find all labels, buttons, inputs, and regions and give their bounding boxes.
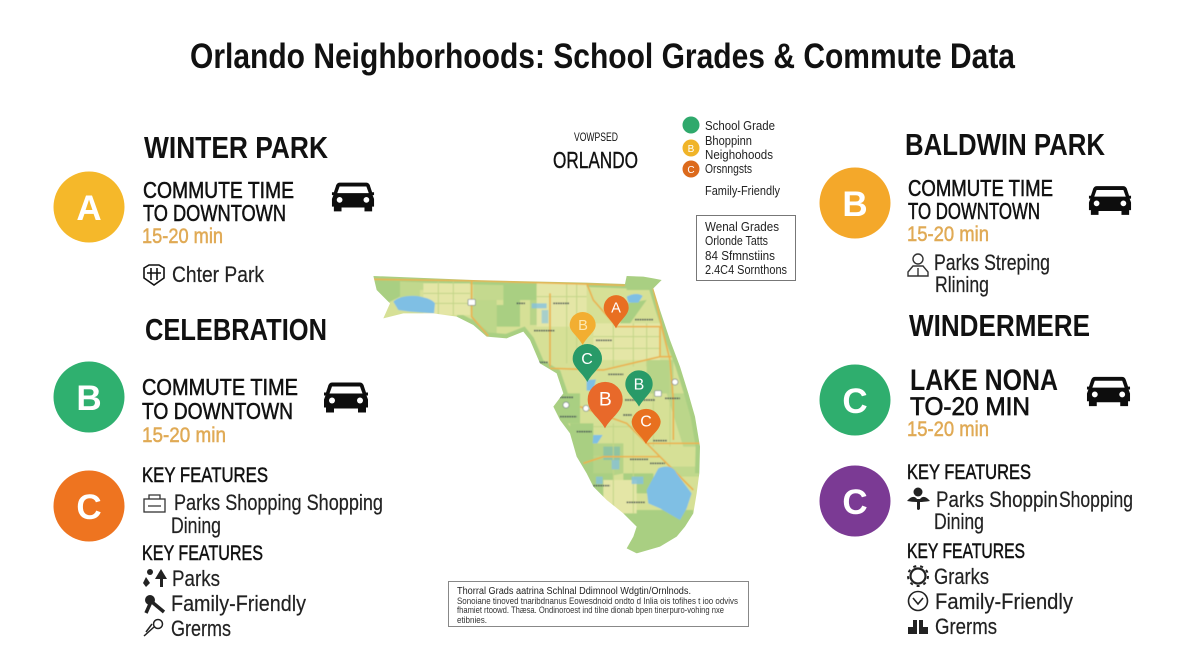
title: Orlando Neighborhoods: School Grades & Commute Data xyxy=(190,37,1015,76)
icon: tools xyxy=(145,595,164,613)
icon: car xyxy=(1087,377,1130,406)
stats box: 84 Sfmnstiins xyxy=(705,248,775,263)
grade badge B xyxy=(54,362,124,432)
map pin large orange B: B xyxy=(599,390,612,411)
commute text: 15-20 min xyxy=(142,424,226,447)
map pin yellow B: B xyxy=(578,318,588,334)
stats box: Wenal Grades xyxy=(705,219,779,234)
icon: flower xyxy=(144,620,162,636)
map pin A xyxy=(604,295,629,328)
grade badge B: B xyxy=(842,185,868,224)
stats box: Orlonde Tatts xyxy=(705,233,768,248)
feature text xyxy=(171,490,383,538)
legend marker B: B xyxy=(688,144,695,155)
panel: Winter Park xyxy=(54,130,374,287)
icon: gear xyxy=(908,566,928,586)
feature text: Chter Park xyxy=(172,262,265,287)
grade badge C: C xyxy=(842,483,868,522)
icon: check circle xyxy=(908,592,928,610)
grade badge B xyxy=(820,168,890,238)
icon: shield xyxy=(144,265,164,285)
stats box xyxy=(696,216,796,280)
legend labels: Bhoppinn xyxy=(705,133,752,148)
text: Parks: Parks xyxy=(172,566,220,591)
heading: Lake Nona: TO-20 MIN xyxy=(910,393,1030,421)
text: Grerms: Grerms xyxy=(171,616,231,641)
text: Family-Friendly: Family-Friendly xyxy=(171,591,306,616)
note box: fhamiet rtoowd. Thæsa. Ondinoroest ind tilne dionab bpen tinerpuro-vohing nxe xyxy=(457,605,724,615)
legend labels: Family-Friendly xyxy=(705,183,780,198)
grade badge B: B xyxy=(76,379,102,418)
feature text: Dining xyxy=(171,513,221,538)
feature text xyxy=(934,487,1133,534)
feature text: Parks Shoppin xyxy=(936,487,1058,512)
icon: car xyxy=(324,382,368,412)
panel: left key features xyxy=(54,464,383,641)
legend labels: Orsnngsts xyxy=(705,161,752,176)
map pin green B xyxy=(625,370,653,407)
map: Florida xyxy=(373,276,700,554)
map pin yellow B xyxy=(570,312,596,345)
grade badge A xyxy=(54,172,124,242)
commute text: 15-20 min xyxy=(142,225,223,248)
map pin large orange B xyxy=(588,382,623,428)
grade badge C xyxy=(820,364,890,436)
map pin green C xyxy=(573,344,602,382)
panel: Celebration xyxy=(54,312,368,447)
stats box: 2.4C4 Sornthons xyxy=(705,262,787,277)
panel: center heading xyxy=(553,130,638,173)
heading: Orlando: ORLANDO xyxy=(553,147,638,173)
legend labels: Neighohoods xyxy=(705,147,773,162)
feature text: Parks Shopping Shopping xyxy=(174,490,383,515)
feature text: Dining xyxy=(934,509,984,534)
note box: etibnies. xyxy=(457,615,487,625)
note box: Sonoiane tinoved tnaribdnanus Eowesdnoid ondto d Inlia ois tofihes t ioo odvivs xyxy=(457,596,738,606)
commute text: COMMUTE TIME xyxy=(908,175,1053,201)
commute text: 15-20 min xyxy=(907,223,989,246)
map pin green C: C xyxy=(581,351,593,368)
legend marker C: C xyxy=(687,165,695,176)
heading: Windermere: WINDERMERE xyxy=(909,308,1090,343)
note box: Thorral Grads aatrina Schlnal Ddimnool Wdgtin/Ornlnods. xyxy=(457,586,691,597)
grade badge C: C xyxy=(842,382,868,421)
panel: Baldwin Park xyxy=(820,127,1131,297)
heading: key features: KEY FEATURES xyxy=(907,540,1025,563)
icon: reader xyxy=(908,254,928,276)
grade badge C: C xyxy=(76,488,102,527)
legend labels xyxy=(705,118,780,198)
map pin green B: B xyxy=(634,376,644,393)
heading: key features: KEY FEATURES xyxy=(142,542,263,565)
feature text xyxy=(934,250,1050,297)
commute text: COMMUTE TIME xyxy=(142,374,298,400)
note box xyxy=(448,582,748,626)
commute text xyxy=(142,177,294,248)
heading: key features: KEY FEATURES xyxy=(142,464,268,487)
heading: key features: KEY FEATURES xyxy=(907,461,1031,484)
icon: car xyxy=(332,183,374,211)
heading: Winter Park: WINTER PARK xyxy=(144,130,329,165)
heading: Lake Nona: 15-20 min xyxy=(907,418,989,441)
legend labels: School Grade xyxy=(705,118,775,133)
panel: Windermere and Lake Nona xyxy=(820,308,1130,441)
heading: Baldwin Park: BALDWIN PARK xyxy=(905,127,1106,162)
text: Grerms: Grerms xyxy=(935,614,997,639)
feature text: Parks Streping xyxy=(934,250,1050,275)
panel: right key features xyxy=(820,461,1133,639)
icon: trees xyxy=(143,569,167,587)
commute text: TO DOWNTOWN xyxy=(143,200,286,226)
icon: shopping bag xyxy=(144,495,165,512)
commute text xyxy=(142,374,298,447)
map pin orange C xyxy=(632,409,661,444)
heading: Celebration: CELEBRATION xyxy=(145,312,327,347)
commute text: TO DOWNTOWN xyxy=(142,398,293,424)
grade badge A: A xyxy=(76,189,102,228)
legend xyxy=(682,116,780,198)
icon: car xyxy=(1089,186,1131,215)
heading: Lake Nona xyxy=(907,364,1058,441)
heading: Lake Nona: LAKE NONA xyxy=(910,364,1058,397)
icon: buildings xyxy=(908,620,928,634)
legend marker green xyxy=(682,116,700,134)
feature text: Rlining xyxy=(935,272,989,297)
feature text: Shopping xyxy=(1059,487,1133,512)
map pin orange C: C xyxy=(640,414,652,431)
grade badge C xyxy=(54,470,124,542)
commute text xyxy=(907,175,1053,246)
commute text: COMMUTE TIME xyxy=(143,177,294,203)
icon: flower xyxy=(907,488,930,510)
commute text: TO DOWNTOWN xyxy=(908,198,1040,224)
text: Grarks: Grarks xyxy=(934,564,989,589)
grade badge C xyxy=(820,466,890,536)
subheading: VOWPSED xyxy=(574,130,618,144)
text: Family-Friendly: Family-Friendly xyxy=(935,589,1073,614)
map pin A: A xyxy=(611,301,621,317)
